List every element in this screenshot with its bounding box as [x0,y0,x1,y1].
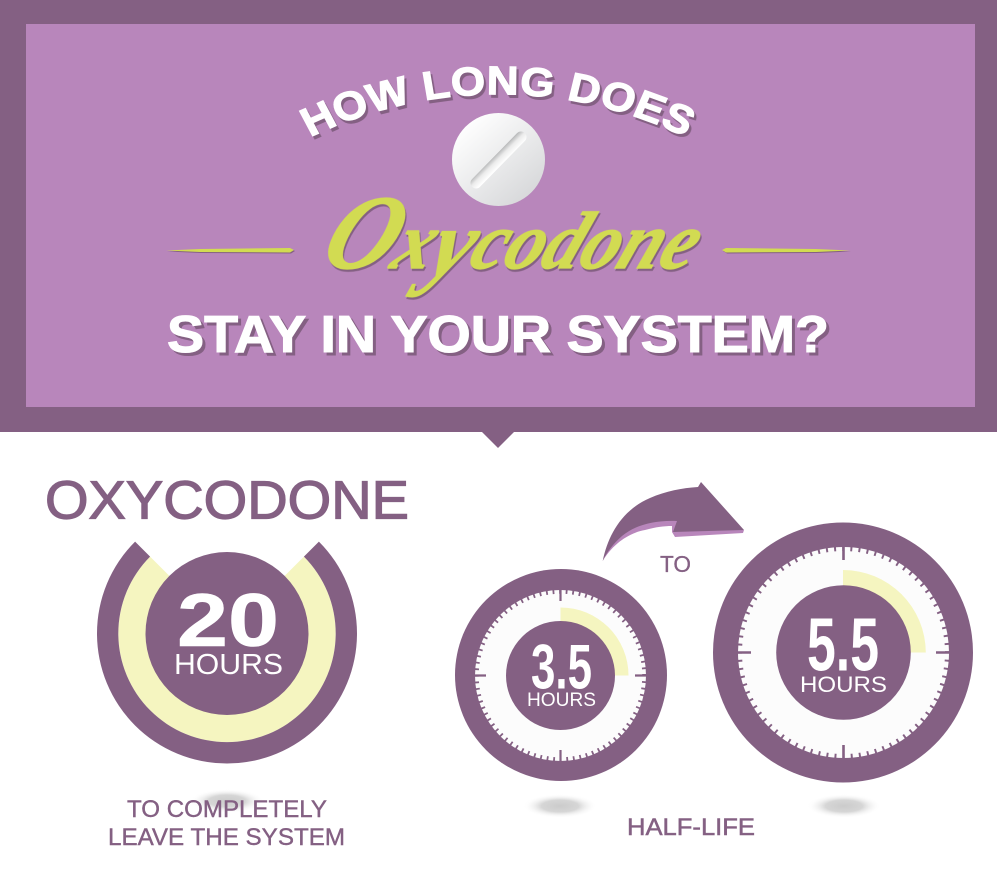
shadow under large gauge [807,794,881,818]
chart: 3.5 hours gauge: HOURS [527,690,596,711]
chart: 20 hours ring [97,542,357,764]
divider: left green line [166,248,294,252]
caption: to completely leave the system: LEAVE THE SYSTEM [108,824,345,851]
heading: oxycodone: OXYCODONE [45,470,409,530]
heading: oxycodone script: Ox [308,174,452,291]
caption: half-life: HALF-LIFE [627,814,755,841]
chart: 5.5 hours gauge: HOURS [800,672,887,697]
panel: half-life [455,482,973,841]
arrow: curved to next gauge [603,482,744,561]
shadow under small gauge [523,794,597,818]
chart: 3.5 hours gauge: 3.5 [531,632,592,702]
chart: 20 hours ring: 20 [177,578,279,662]
caption: to completely leave the system: TO COMPLETELY [127,796,327,823]
shadow under ring [190,789,264,813]
caption: to completely leave the system [108,796,345,851]
panel: header banner [0,0,997,448]
icon: white pill [452,113,545,206]
chart: 5.5 hours gauge: 5.5 [807,602,879,686]
label: to: TO [660,551,691,577]
chart: 20 hours ring: HOURS [174,649,283,681]
chart: 3.5 hours gauge [455,569,667,781]
panel: oxycodone total time [45,470,409,851]
heading: stay in your system: STAY IN YOUR SYSTEM? [167,306,829,364]
heading: oxycodone script: y [405,190,498,297]
heading: oxycodone script: codone [459,197,717,286]
heading: how long does: HOW LONG DOES [298,66,697,140]
chart: 5.5 hours gauge [713,522,973,782]
divider: right green line [722,248,850,252]
